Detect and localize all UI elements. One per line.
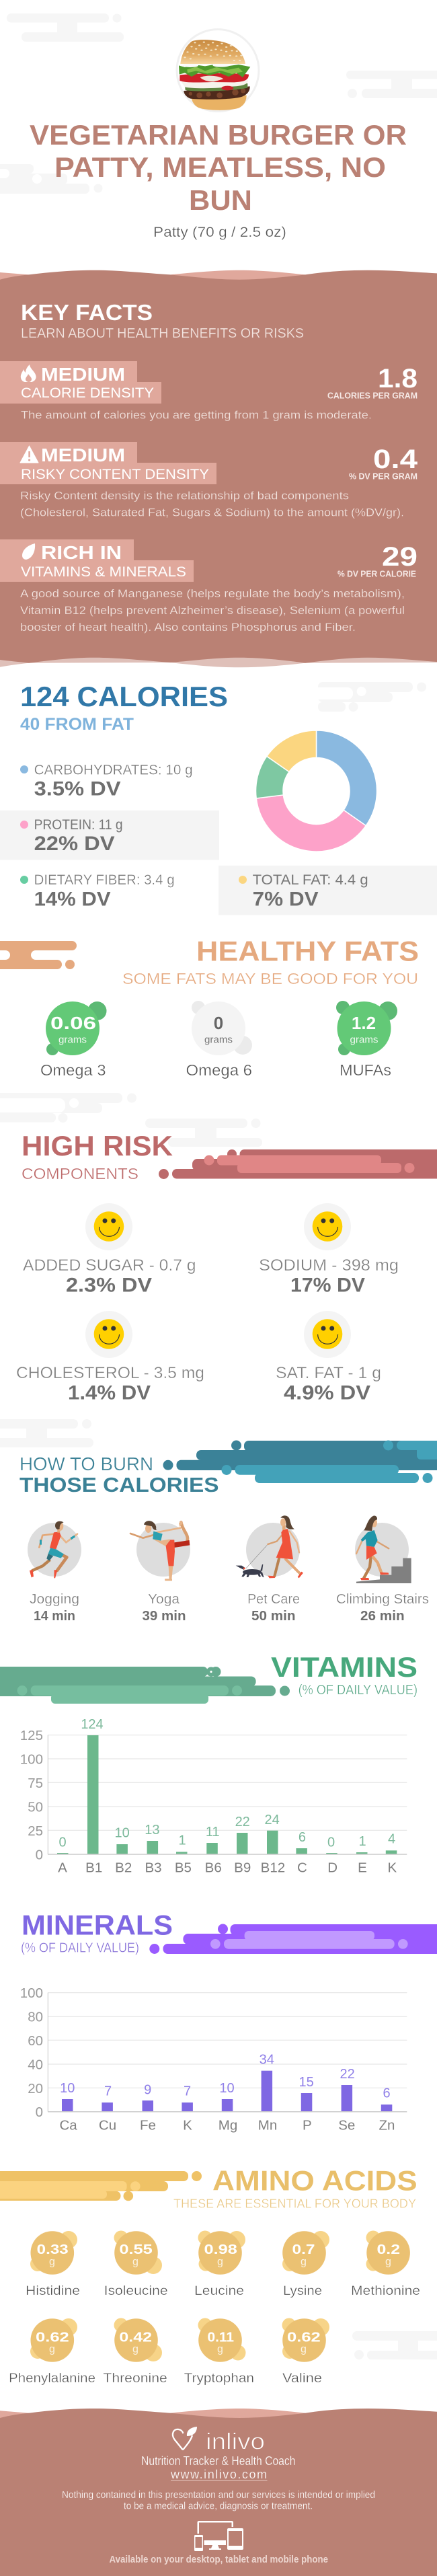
risk: added sugar	[23, 1203, 196, 1296]
fact: risky content density: 0.4	[373, 445, 418, 474]
icon: yoga pose	[130, 1521, 190, 1581]
fact: rich in vitamins and minerals: Vitamin B12 (helps prevent Alzheimer’s disease), Selenium (a powerful	[20, 604, 405, 617]
bar chart: vitamins: B5	[175, 1860, 192, 1876]
stat: MUFAs: grams	[350, 1035, 378, 1046]
amino acid: isoleucine	[104, 2230, 168, 2298]
serving size: Patty (70 g / 2.5 oz)	[153, 225, 286, 240]
risk: sodium: SODIUM - 398 mg	[259, 1256, 399, 1275]
amino acid: phenylalanine: g	[49, 2344, 55, 2355]
stat: omega 6: Omega 6	[186, 1061, 252, 1079]
disclaimer: to be a medical advice, diagnosis or treatment.	[124, 2501, 313, 2512]
legend: dietary fiber	[20, 872, 175, 910]
icon: devices	[194, 2521, 243, 2551]
legend: protein	[0, 810, 219, 860]
amino acid: histidine: Histidine	[26, 2284, 80, 2298]
amino acid: valine: g	[301, 2344, 307, 2355]
amino acid: valine	[282, 2318, 329, 2386]
bar chart: minerals: 15	[299, 2075, 314, 2090]
bar chart: minerals: 7	[104, 2084, 112, 2099]
activity: climbing stairs: Climbing Stairs	[336, 1592, 429, 1607]
fact: risky content density: Risky Content density is the relationship of bad components	[20, 490, 349, 502]
risk: cholesterol	[16, 1311, 204, 1404]
amino acid: lysine	[282, 2231, 329, 2298]
bar chart: minerals: 10	[60, 2081, 75, 2096]
fact: calorie density: 1.8	[378, 364, 418, 393]
activity: pet care: 50 min	[251, 1609, 296, 1624]
stat: omega 3	[40, 1001, 106, 1079]
bar chart: vitamins: 75	[28, 1776, 43, 1791]
subheading: components: COMPONENTS	[22, 1165, 138, 1182]
stat: MUFAs: MUFAs	[340, 1061, 391, 1079]
bar chart: minerals: 10	[219, 2081, 235, 2096]
activity: yoga: Yoga	[148, 1592, 180, 1607]
legend: protein: PROTEIN: 11 g	[34, 817, 123, 833]
icon: smiley	[304, 1203, 351, 1250]
bar chart: vitamins: B3	[145, 1860, 162, 1876]
bar chart: minerals: 40	[28, 2057, 43, 2073]
bar chart: minerals: P	[303, 2117, 312, 2133]
stat: omega 6: 0	[214, 1013, 223, 1033]
decoration: healthy fats bars	[0, 941, 87, 969]
amino acid: tryptophan: Tryptophan	[184, 2372, 254, 2386]
fact: rich in vitamins and minerals: A good source of Manganese (helps regulate the body’s metabolism),	[20, 587, 405, 600]
legend: total fat: TOTAL FAT: 4.4 g	[253, 872, 368, 888]
heading: KEY FACTS	[21, 300, 153, 325]
legend: total fat	[218, 866, 437, 915]
legend: carbohydrates	[20, 762, 193, 800]
disclaimer	[62, 2490, 375, 2512]
icon: woman walking dog	[236, 1515, 303, 1578]
amino acid: phenylalanine: 0.62	[36, 2331, 69, 2345]
decoration: amino acids bars	[0, 2171, 202, 2201]
fact: rich in vitamins and minerals: booster of heart health). Also contains Phosphorus and Fiber.	[20, 621, 356, 634]
bar chart: minerals: 34	[260, 2052, 274, 2067]
risk: saturated fat	[276, 1311, 381, 1404]
activity: pet care: Pet Care	[247, 1592, 300, 1607]
amino acid: histidine: 0.33	[37, 2242, 69, 2257]
risk: saturated fat: 4.9% DV	[284, 1381, 370, 1404]
amino acid: leucine: 0.98	[204, 2242, 237, 2257]
fact: calorie density: MEDIUM	[41, 364, 125, 385]
bar chart: minerals: 100	[20, 1985, 43, 2001]
bar chart: minerals: K	[183, 2117, 192, 2133]
subheading: LEARN ABOUT HEALTH BENEFITS OR RISKS	[21, 326, 304, 341]
bar chart: vitamins: B6	[205, 1860, 222, 1876]
fact: calorie density: The amount of calories you are getting from 1 gram is moderate.	[21, 409, 372, 421]
fact: risky content density: % DV PER GRAM	[349, 471, 418, 482]
bar chart: vitamins: 4	[388, 1832, 395, 1847]
amino acid: phenylalanine	[9, 2318, 95, 2386]
heading: amino acids: AMINO ACIDS	[212, 2165, 418, 2197]
heading: healthy fats: HEALTHY FATS	[196, 936, 419, 967]
risk: cholesterol: 1.4% DV	[68, 1381, 151, 1404]
bar chart: minerals: 9	[144, 2082, 151, 2097]
amino acid: methionine	[351, 2230, 420, 2298]
stat: MUFAs: 1.2	[352, 1013, 376, 1033]
legend: dietary fiber: 14% DV	[34, 888, 111, 910]
bar chart: minerals: 22	[340, 2067, 355, 2082]
bar chart: minerals: Fe	[140, 2117, 156, 2133]
fact: calorie density: CALORIES PER GRAM	[327, 390, 418, 401]
bar chart: vitamins: B2	[115, 1860, 132, 1876]
subheading: minerals: (% OF DAILY VALUE)	[21, 1941, 139, 1956]
bar chart: vitamins: 1	[178, 1833, 186, 1848]
amino acid: tryptophan: g	[217, 2344, 223, 2355]
amino acid: lysine: g	[301, 2257, 307, 2268]
bar chart: minerals: 6	[383, 2086, 391, 2101]
stat: omega 3: Omega 3	[40, 1061, 106, 1079]
icon: smiley	[304, 1311, 351, 1358]
risk: added sugar: 2.3% DV	[66, 1274, 152, 1296]
bar chart: vitamins	[20, 1717, 407, 1876]
fact: risky content density: (Cholesterol, Saturated Fat, Sugars & Sodium) to the amount (%DV/gr).	[20, 506, 404, 519]
fact: calorie density: CALORIE DENSITY	[21, 385, 154, 401]
subheading: vitamins: (% OF DAILY VALUE)	[299, 1683, 418, 1698]
amino acid: phenylalanine: Phenylalanine	[9, 2372, 95, 2386]
activity: yoga: 39 min	[143, 1609, 186, 1624]
fact: risky content density: RISKY CONTENT DENSITY	[21, 466, 209, 482]
bar chart: vitamins: 100	[20, 1751, 43, 1768]
bar chart: vitamins: 6	[299, 1830, 306, 1845]
bar chart: vitamins: 11	[206, 1825, 220, 1840]
title: PATTY, MEATLESS, NO	[54, 151, 386, 183]
decoration: vitamins bars	[0, 1667, 290, 1704]
fact: risky content density	[0, 442, 418, 519]
bar chart: minerals: Mn	[258, 2117, 277, 2133]
amino acid: methionine: 0.2	[376, 2242, 400, 2257]
amino acid: threonine: 0.42	[119, 2331, 152, 2345]
heading: how to burn: HOW TO BURN	[19, 1453, 153, 1474]
icon: leaf	[22, 543, 35, 560]
amino acid: lysine: Lysine	[283, 2284, 322, 2298]
title: VEGETARIAN BURGER OR	[30, 119, 407, 151]
bar chart: vitamins: 0	[58, 1835, 67, 1850]
fact: rich in vitamins and minerals	[0, 539, 418, 634]
activity: jogging: 14 min	[34, 1609, 75, 1624]
bar chart: minerals: 60	[28, 2033, 43, 2049]
icon: woman climbing stairs	[355, 1515, 411, 1583]
decoration: high risk bars	[159, 1149, 437, 1179]
heading: vitamins: VITAMINS	[271, 1651, 418, 1683]
title	[30, 119, 407, 216]
risk: sodium: 17% DV	[290, 1274, 365, 1296]
legend: protein: 22% DV	[34, 833, 115, 855]
risk: cholesterol: CHOLESTEROL - 3.5 mg	[16, 1364, 204, 1382]
bar chart: minerals: Mg	[218, 2117, 237, 2133]
amino acid: lysine: 0.7	[292, 2242, 315, 2257]
stat: omega 6	[186, 1001, 252, 1079]
bar chart: minerals: Zn	[379, 2117, 395, 2133]
heading: minerals: MINERALS	[22, 1909, 173, 1941]
heading: those calories: THOSE CALORIES	[19, 1474, 219, 1497]
amino acid: threonine: g	[132, 2344, 138, 2355]
fact: rich in vitamins and minerals: % DV PER CALORIE	[337, 569, 416, 578]
legend: carbohydrates: CARBOHYDRATES: 10 g	[34, 762, 193, 778]
fact: rich in vitamins and minerals: RICH IN	[41, 542, 122, 563]
footer panel	[0, 2409, 437, 2576]
subheading: amino acids: THESE ARE ESSENTIAL FOR YOUR BODY	[173, 2196, 416, 2210]
decoration: minerals bars	[149, 1924, 437, 1954]
availability note: Available on your desktop, tablet and mobile phone	[109, 2554, 328, 2565]
bar chart: vitamins: 22	[235, 1815, 250, 1829]
amino acid: threonine: Threonine	[103, 2372, 167, 2386]
bar chart: minerals: Se	[338, 2117, 355, 2133]
bar chart: vitamins: 10	[114, 1826, 130, 1841]
legend: carbohydrates: 3.5% DV	[34, 778, 121, 800]
wave top	[0, 270, 437, 287]
amino acid: valine: 0.62	[287, 2331, 321, 2345]
amino acid: histidine: g	[49, 2257, 55, 2268]
amino acid: methionine: Methionine	[351, 2284, 420, 2298]
icon: flame	[21, 365, 36, 382]
bar chart: minerals: 20	[28, 2081, 43, 2096]
heading: calories: 124 CALORIES	[20, 681, 228, 712]
amino acid: tryptophan: 0.11	[207, 2331, 234, 2345]
amino acid: valine: Valine	[282, 2372, 322, 2386]
bar chart: vitamins: 13	[145, 1823, 160, 1838]
icon: jogger	[28, 1521, 81, 1579]
amino acid: leucine: Leucine	[194, 2284, 244, 2298]
amino acid: isoleucine: g	[132, 2257, 138, 2268]
amino acid: leucine: g	[217, 2257, 223, 2268]
bar chart: vitamins: 1	[358, 1834, 366, 1849]
bar chart: vitamins: 24	[264, 1813, 280, 1827]
icon: inlivo heart logo	[173, 2427, 197, 2450]
subheading: from fat: 40 FROM FAT	[20, 715, 134, 734]
bar chart: vitamins: C	[297, 1860, 307, 1876]
activity: climbing stairs	[336, 1515, 429, 1624]
amino acid: methionine: g	[385, 2257, 391, 2268]
activity: climbing stairs: 26 min	[360, 1609, 405, 1624]
bar chart: vitamins: 0	[327, 1835, 335, 1850]
bar chart: vitamins: K	[388, 1860, 397, 1876]
stat: omega 3: grams	[58, 1035, 87, 1046]
bar chart: vitamins: 0	[36, 1847, 43, 1863]
activity: pet care	[236, 1515, 303, 1624]
bar chart: vitamins: B9	[234, 1860, 251, 1876]
subheading: healthy fats: SOME FATS MAY BE GOOD FOR YOU	[122, 970, 418, 987]
bar chart: vitamins: 50	[28, 1800, 43, 1815]
icon: warning	[20, 446, 38, 463]
legend: total fat: 7% DV	[253, 888, 319, 910]
fact: calorie density	[0, 361, 418, 421]
amino acid: isoleucine: Isoleucine	[104, 2284, 168, 2298]
stat: MUFAs	[336, 1001, 397, 1079]
bar chart: vitamins: 124	[81, 1717, 104, 1732]
panel: key facts	[0, 270, 437, 667]
bar chart: minerals	[20, 1985, 407, 2133]
stat: omega 3: 0.06	[50, 1013, 96, 1033]
icon: smiley	[85, 1311, 132, 1358]
amino acid: threonine	[103, 2318, 167, 2386]
heading: high risk: HIGH RISK	[22, 1130, 173, 1162]
website link: www.inlivo.com	[170, 2468, 267, 2481]
donut chart	[256, 730, 377, 851]
tagline: Nutrition Tracker & Health Coach	[141, 2454, 296, 2468]
legend: dietary fiber: DIETARY FIBER: 3.4 g	[34, 872, 175, 888]
bar chart: vitamins: B1	[85, 1860, 102, 1876]
risk: sodium	[259, 1203, 399, 1296]
bar chart: minerals: 0	[36, 2105, 43, 2120]
title: BUN	[189, 184, 252, 216]
fact: rich in vitamins and minerals: 29	[382, 542, 418, 572]
icon: smiley	[85, 1203, 132, 1250]
burger photo	[177, 30, 259, 112]
bar chart: minerals: Ca	[59, 2117, 77, 2133]
fact: rich in vitamins and minerals: VITAMINS & MINERALS	[21, 564, 186, 580]
bar chart: vitamins: 25	[28, 1823, 43, 1839]
activity: jogging: Jogging	[30, 1592, 79, 1607]
amino acid: isoleucine: 0.55	[119, 2242, 153, 2257]
bar chart: vitamins: 125	[20, 1728, 43, 1743]
activity: jogging	[28, 1521, 81, 1624]
amino acid: tryptophan	[184, 2318, 254, 2386]
stat: omega 6: grams	[204, 1035, 233, 1046]
bar chart: vitamins: B12	[261, 1860, 285, 1876]
wave bottom and section fill	[0, 282, 437, 667]
risk: saturated fat: SAT. FAT - 1 g	[276, 1364, 381, 1382]
amino acid: leucine	[194, 2230, 245, 2298]
bar chart: minerals: 7	[184, 2084, 191, 2099]
bar chart: minerals: 80	[28, 2010, 43, 2024]
bar chart: vitamins: D	[327, 1860, 337, 1876]
activity: yoga	[130, 1521, 190, 1624]
risk: added sugar: ADDED SUGAR - 0.7 g	[23, 1256, 196, 1275]
bar chart: vitamins: A	[58, 1860, 67, 1876]
amino acid: histidine	[26, 2231, 80, 2298]
bar chart: minerals: Cu	[99, 2117, 116, 2133]
bar chart: vitamins: E	[358, 1860, 367, 1876]
fact: risky content density: MEDIUM	[41, 445, 125, 465]
logo wordmark: inlivo	[206, 2429, 265, 2455]
decoration: burn bars	[163, 1441, 437, 1483]
disclaimer: Nothing contained in this presentation and our services is intended or implied	[62, 2490, 375, 2501]
